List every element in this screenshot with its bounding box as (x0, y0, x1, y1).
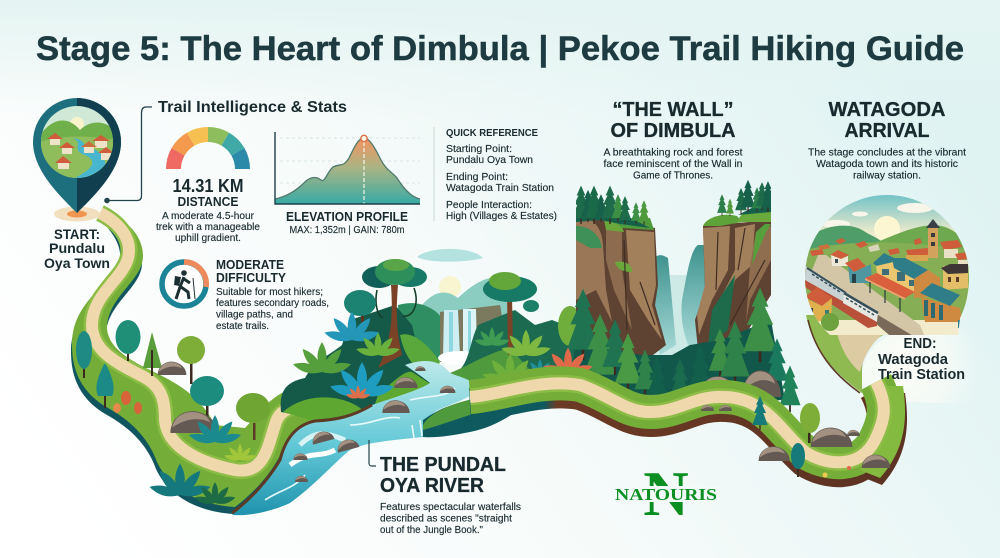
callout: river leader (369, 440, 376, 466)
left jungle mass (281, 305, 432, 420)
callout: START label (44, 226, 110, 271)
rocks and flowers on left slope (113, 362, 217, 433)
text: river description (380, 501, 521, 536)
stat: distance: DISTANCE (178, 194, 239, 209)
small jungle tree (344, 290, 376, 340)
text: river description: described as scenes "straight (380, 512, 512, 524)
mid bank dark base (423, 400, 540, 437)
distant mountains (405, 278, 520, 340)
panel: jungle backdrop and waterfall (281, 249, 580, 420)
ribbon green land (470, 382, 884, 462)
stat: elevation (286, 209, 408, 236)
station canopy (865, 273, 915, 298)
right cliff (695, 207, 771, 350)
trail path (92, 213, 335, 471)
trees on left slope (76, 320, 270, 440)
text: watagoda description: The stage concludes at the vibrant (808, 146, 966, 158)
hillside green (400, 334, 440, 378)
stat: elevation: ELEVATION PROFILE (286, 209, 408, 224)
canyon left strand (652, 255, 676, 355)
stat: difficulty: village paths, and (216, 308, 293, 320)
gauge: distance (173, 134, 243, 169)
teal house (845, 258, 866, 272)
stat: difficulty: Suitable for most hikers; (216, 286, 323, 298)
canyon right strand (681, 245, 708, 350)
text: wall description: face reminiscent of the Wall in (604, 158, 743, 170)
divider (433, 127, 435, 221)
river rocks (293, 366, 455, 482)
logo: Natouris (612, 459, 720, 529)
foreground pine forest (567, 288, 800, 412)
path tail below vignette (806, 315, 895, 393)
river water (232, 361, 475, 515)
callout: END label: Train Station (878, 367, 965, 383)
heading: watagoda arrival (828, 99, 946, 142)
village tree (821, 313, 839, 331)
ribbon end underside (862, 393, 907, 485)
village scene (805, 195, 970, 340)
text: watagoda description: Watagoda town and its historic (816, 158, 958, 170)
jungle foliage (292, 312, 555, 400)
trail path (470, 382, 884, 462)
panel: quick reference: Watagoda Train Station (446, 182, 554, 194)
ribbon green land (72, 212, 345, 507)
sky dome (417, 249, 483, 262)
title: Stage 5: The Heart of Dimbula | Pekoe Trail Hiking Guide (36, 30, 964, 68)
heading: trail intelligence: Trail Intelligence & Stats (158, 99, 347, 116)
stat: distance: uphill gradient. (175, 232, 241, 244)
river bank edge (232, 405, 372, 513)
jungle green bank (372, 372, 432, 413)
stat: distance: A moderate 4.5-hour (162, 210, 254, 222)
panel: trail ribbon right section (423, 329, 990, 485)
distant houses (810, 249, 824, 256)
ribbon light edge (92, 213, 335, 471)
stat: difficulty: DIFFICULTY (216, 271, 287, 285)
panel: quick reference: High (Villages & Estates) (446, 210, 557, 222)
callout: START label: Oya Town (44, 255, 110, 271)
canyon backdrop (650, 275, 710, 360)
panel: Wall of Dimbula cliffs (542, 180, 800, 412)
trees and rocks on ribbon (701, 396, 890, 478)
ribbon light edge (470, 382, 884, 462)
callout: END label: Watagoda (878, 352, 949, 368)
stat: distance (156, 176, 260, 244)
stat: difficulty: MODERATE (216, 258, 284, 272)
stat: elevation: MAX: 1,352m | GAIN: 780m (290, 224, 405, 236)
station main walls (876, 262, 918, 295)
logo: Natouris: NATOURIS (615, 485, 717, 504)
mid bank green (423, 398, 478, 430)
heading: watagoda arrival: WATAGODA (828, 99, 946, 121)
panel: quick reference: Pundalu Oya Town (446, 154, 533, 166)
green mound behind forest (558, 306, 582, 346)
text: watagoda description: railway station. (853, 170, 921, 182)
text: wall description: Game of Thrones. (633, 170, 713, 182)
right house (943, 264, 968, 290)
lower right building (921, 297, 962, 322)
callout: END label (878, 336, 965, 383)
right bank green (450, 348, 530, 395)
heading: the wall: “THE WALL” (612, 99, 734, 121)
panel: quick reference (446, 127, 557, 222)
text: wall description: A breathtaking rock and forest (604, 146, 743, 158)
panel: quick reference: People Interaction: (446, 199, 532, 211)
big jungle tree (362, 259, 427, 368)
ribbon underside (470, 390, 884, 470)
text: wall description (604, 146, 743, 182)
leader line: pin to stats (104, 107, 152, 203)
panel: river (232, 361, 475, 515)
white house (830, 250, 849, 259)
ribbon underside (71, 219, 344, 514)
foreground house (805, 287, 832, 306)
heading: watagoda arrival: ARRIVAL (844, 120, 930, 142)
background forest (398, 303, 445, 370)
ribbon end green (860, 386, 905, 478)
river cascade foam and ripples (265, 388, 455, 500)
panel: quick reference: QUICK REFERENCE (446, 127, 538, 139)
heading: the wall: OF DIMBULA (610, 120, 736, 142)
icon: difficulty ring with hiker (162, 262, 206, 306)
heading: the wall (610, 99, 736, 142)
station left roof (873, 253, 894, 266)
right jungle tree (483, 272, 539, 355)
panel: trail ribbon left section (71, 212, 345, 514)
end-of-trail blob (858, 329, 990, 405)
right jungle mass (450, 305, 580, 388)
clock tower (928, 228, 938, 258)
left cliff (576, 215, 666, 365)
stat: difficulty: features secondary roads, (216, 297, 329, 309)
stat: distance: 14.31 KM (172, 176, 244, 196)
logo: Natouris: N (643, 459, 689, 529)
callout: START label: Pundalu (49, 240, 105, 256)
stat: distance: trek with a manageable (156, 221, 260, 233)
heading: pundal oya river: THE PUNDAL (380, 454, 506, 476)
callout: START label: START: (54, 226, 100, 242)
icon: start pin (33, 98, 121, 222)
panel: quick reference: Ending Point: (446, 171, 508, 183)
stat: difficulty (216, 258, 329, 332)
station blue roof (892, 258, 928, 279)
track and train (876, 315, 912, 335)
callout: END label: END: (904, 336, 936, 352)
text: river description: Features spectacular waterfalls (380, 501, 521, 513)
platform road (812, 255, 925, 337)
text: watagoda description (808, 146, 966, 182)
hills (805, 226, 884, 260)
cliff-top pine forest (572, 180, 775, 228)
station orange wing (914, 270, 940, 298)
heading: pundal oya river (380, 454, 506, 497)
falls cliff (440, 305, 502, 362)
panel: Watagoda station vignette (805, 195, 970, 393)
panel: quick reference: Starting Point: (446, 143, 512, 155)
waterfalls (438, 309, 482, 365)
red plant (542, 348, 594, 377)
leaves on lower slope (148, 415, 257, 506)
heading: pundal oya river: OYA RIVER (380, 475, 485, 497)
text: river description: out of the Jungle Book." (380, 524, 483, 536)
chart: elevation profile (275, 132, 420, 204)
stat: difficulty: estate trails. (216, 320, 269, 332)
